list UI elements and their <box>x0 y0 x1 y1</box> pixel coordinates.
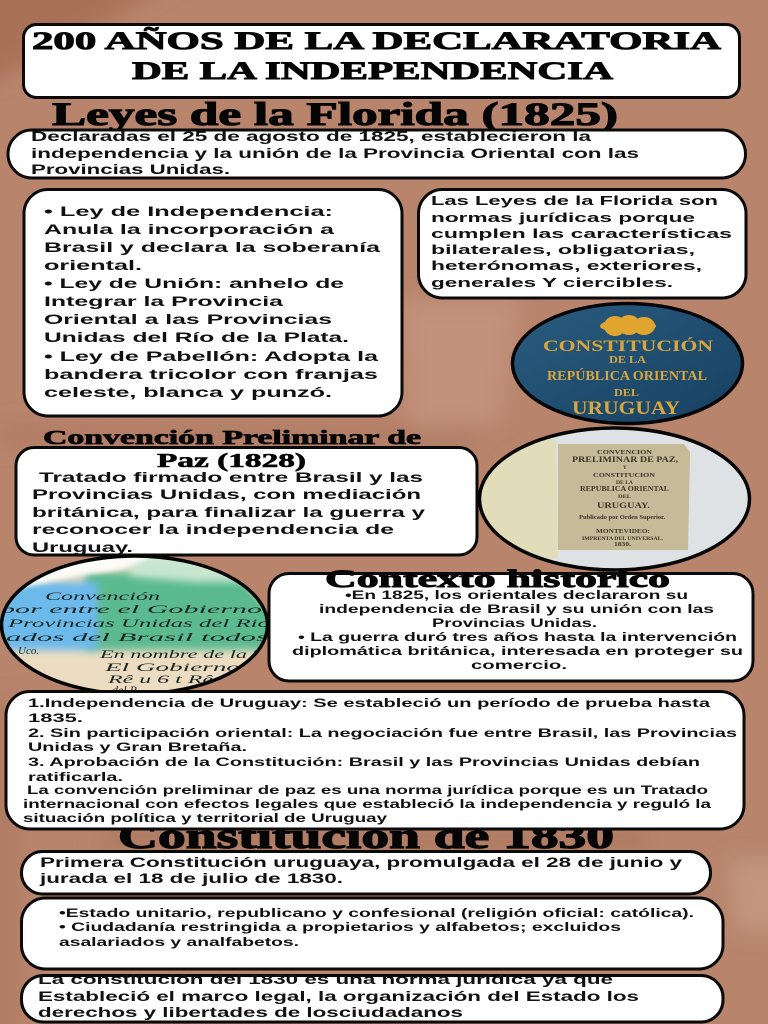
title text: 200 AÑOS DE LA DECLARATORIA <box>32 26 722 55</box>
text: tres leyes: • Ley de Independencia: <box>44 203 333 219</box>
image: handwritten manuscript: por entre el Gobierno <box>0 602 262 616</box>
text: puntos: 1.Independencia de Uruguay: Se estableció un período de prueba hasta <box>28 696 711 710</box>
text: tratado: británica, para finalizar la guerra y <box>32 505 426 520</box>
panel: convencion puntos <box>6 692 744 829</box>
title text: DE LA INDEPENDENCIA <box>132 56 614 85</box>
text: puntos: 3. Aprobación de la Constitución: Brasil y las Provincias Unidas debían <box>28 755 700 769</box>
text: tres leyes: Oriental a las Provincias <box>44 311 332 327</box>
text: tres leyes: Brasil y declara la soberanía <box>44 239 380 255</box>
image: handwritten manuscript: Rê u 6 t Rê <box>106 672 214 686</box>
text: normas juridicas: generales Y ciercibles. <box>431 276 673 290</box>
text: tres leyes: celeste, blanca y punzó. <box>44 384 332 400</box>
text: puntos: 2. Sin participación oriental: La negociación fue entre Brasil, las Provincias <box>28 726 738 740</box>
text: tres leyes: Integrar la Provincia <box>44 293 283 309</box>
image: book photo: 1830. <box>614 542 632 548</box>
panel: norma juridica 1830 <box>22 972 723 1022</box>
image: handwritten manuscript: del R <box>112 683 138 697</box>
image: book photo: REPUBLICA ORIENTAL <box>580 485 669 493</box>
text: norma juridica 1830 <box>38 972 639 1020</box>
text: norma juridica 1830: derechos y libertades de losciudadanos <box>38 1005 463 1020</box>
text: estado unitario <box>59 908 694 949</box>
image: handwritten manuscript <box>0 556 268 690</box>
heading: Leyes de la Florida: Leyes de la Florida (1825) <box>52 97 618 133</box>
text: declaradas: Provincias Unidas. <box>31 162 230 177</box>
image: book photo: CONVENCION <box>597 450 653 456</box>
image: book photo: CONSTITUCION <box>593 473 656 479</box>
text: contexto <box>292 588 743 672</box>
text: puntos: La convención preliminar de paz es una norma jurídica porque es un Tratado <box>27 783 708 797</box>
title panel <box>24 24 740 98</box>
text: puntos: ratificarla. <box>28 770 123 784</box>
image: handwritten manuscript: Uco. <box>18 645 39 657</box>
image: handwritten manuscript: ados del Brasil todos <box>6 630 269 644</box>
text: puntos <box>23 696 738 825</box>
text: contexto: •En 1825, los orientales declararon su <box>345 588 688 602</box>
text: normas juridicas: heterónomas, exteriores, <box>431 259 702 273</box>
image: book photo: Y <box>623 466 627 471</box>
title text <box>32 26 722 85</box>
image: constitucion cover: REPÚBLICA ORIENTAL <box>547 367 707 384</box>
text: tratado: Uruguay. <box>32 540 133 555</box>
text: primera constitucion <box>38 855 683 886</box>
text: norma juridica 1830: Estableció el marco legal, la organización del Estado los <box>38 989 639 1004</box>
text: contexto: • La guerra duró tres años hasta la intervención <box>298 630 737 644</box>
text: tres leyes: • Ley de Unión: anhelo de <box>44 275 344 291</box>
image: handwritten manuscript: En nombre de la T <box>98 647 267 661</box>
heading: contexto historico: Contexto historico <box>325 566 670 593</box>
text: tratado: Provincias Unidas, con mediación <box>32 487 421 502</box>
text: normas juridicas: bilaterales, obligatorias, <box>431 243 695 257</box>
text: tratado <box>32 470 426 555</box>
text: tres leyes: • Ley de Pabellón: Adopta la <box>44 348 378 364</box>
text: contexto: comercio. <box>471 658 567 672</box>
panel: tres leyes <box>24 190 402 416</box>
panel: normas juridicas <box>418 190 746 298</box>
text: tres leyes: bandera tricolor con franjas <box>44 366 378 382</box>
text: tratado: Tratado firmado entre Brasil y las <box>39 470 423 485</box>
text: contexto: Provincias Unidas. <box>432 616 597 630</box>
text: normas juridicas: Las Leyes de la Florida son <box>431 194 718 208</box>
text: puntos: Unidas y Gran Bretaña. <box>28 740 247 754</box>
text: tratado: reconocer la independencia de <box>32 522 395 537</box>
image: book photo: Publicado por Orden Superior. <box>579 515 666 521</box>
text: estado unitario: asalariados y analfabetos. <box>59 937 299 949</box>
panel: primera constitucion <box>22 852 710 894</box>
image: book photo: MONTEVIDEO: <box>596 529 650 535</box>
text: declaradas: independencia y la unión de la Provincia Oriental con las <box>31 146 639 161</box>
panel: estado unitario <box>22 898 723 969</box>
panel: contexto historico <box>269 566 753 681</box>
text: estado unitario: •Estado unitario, republicano y confesional (religión oficial: católica). <box>59 908 694 920</box>
image: book photo <box>476 424 752 575</box>
text: declaradas: Declaradas el 25 de agosto de 1825, establecieron la <box>31 129 592 144</box>
image: book photo: IMPRENTA DEL UNIVERSAL. <box>582 537 664 542</box>
image: book photo: PRELIMINAR DE PAZ, <box>572 455 678 464</box>
text: norma juridica 1830: La constitución del 1830 es una norma jurídica ya que <box>38 972 614 987</box>
image: handwritten manuscript: Convención <box>45 589 160 603</box>
heading: convencion preliminar: Convención Preliminar de <box>43 428 422 449</box>
image: book photo: URUGUAY. <box>597 501 650 510</box>
image: constitucion cover: URUGUAY <box>572 398 680 419</box>
text: puntos: internacional con efectos legales que estableció la independencia y reguló la <box>23 797 711 811</box>
image: book photo: DEL <box>618 495 632 500</box>
image: constitucion cover: DEL <box>614 388 639 399</box>
text: puntos: situación política y territorial de Uruguay <box>23 811 387 825</box>
text: normas juridicas: normas jurídicas porque <box>431 211 695 225</box>
heading: paz 1828: Paz (1828) <box>157 450 306 472</box>
panel: tratado <box>16 448 477 555</box>
text: tres leyes: oriental. <box>44 257 142 273</box>
text: tres leyes <box>44 203 380 400</box>
image: constitucion cover <box>510 300 746 428</box>
text: primera constitucion: jurada el 18 de julio de 1830. <box>38 871 343 886</box>
text: primera constitucion: Primera Constitución uruguaya, promulgada el 28 de junio y <box>40 855 683 870</box>
text: normas juridicas: cumplen las características <box>431 227 732 241</box>
text: contexto: independencia de Brasil y su unión con las <box>319 602 715 616</box>
text: tres leyes: Anula la incorporación a <box>44 221 334 237</box>
text: normas juridicas <box>431 194 732 290</box>
image: constitucion cover: CONSTITUCIÓN <box>543 336 714 355</box>
panel: declaradas <box>8 129 746 178</box>
text: contexto: diplomática británica, interesada en proteger su <box>292 644 743 658</box>
text: estado unitario: • Ciudadanía restringida a propietarios y alfabetos; excluidos <box>59 922 621 934</box>
text: tres leyes: Unidas del Río de la Plata. <box>44 329 349 345</box>
text: declaradas <box>31 129 639 177</box>
text: puntos: 1835. <box>28 711 83 725</box>
image: constitucion cover: DE LA <box>609 355 647 366</box>
heading: constitucion de 1830: Constitución de 1830 <box>118 816 614 856</box>
image: handwritten manuscript: El Gobierno <box>103 660 240 674</box>
image: handwritten manuscript: Provincias Unidas del Rio <box>6 616 270 630</box>
image: book photo: DE LA <box>616 481 633 486</box>
